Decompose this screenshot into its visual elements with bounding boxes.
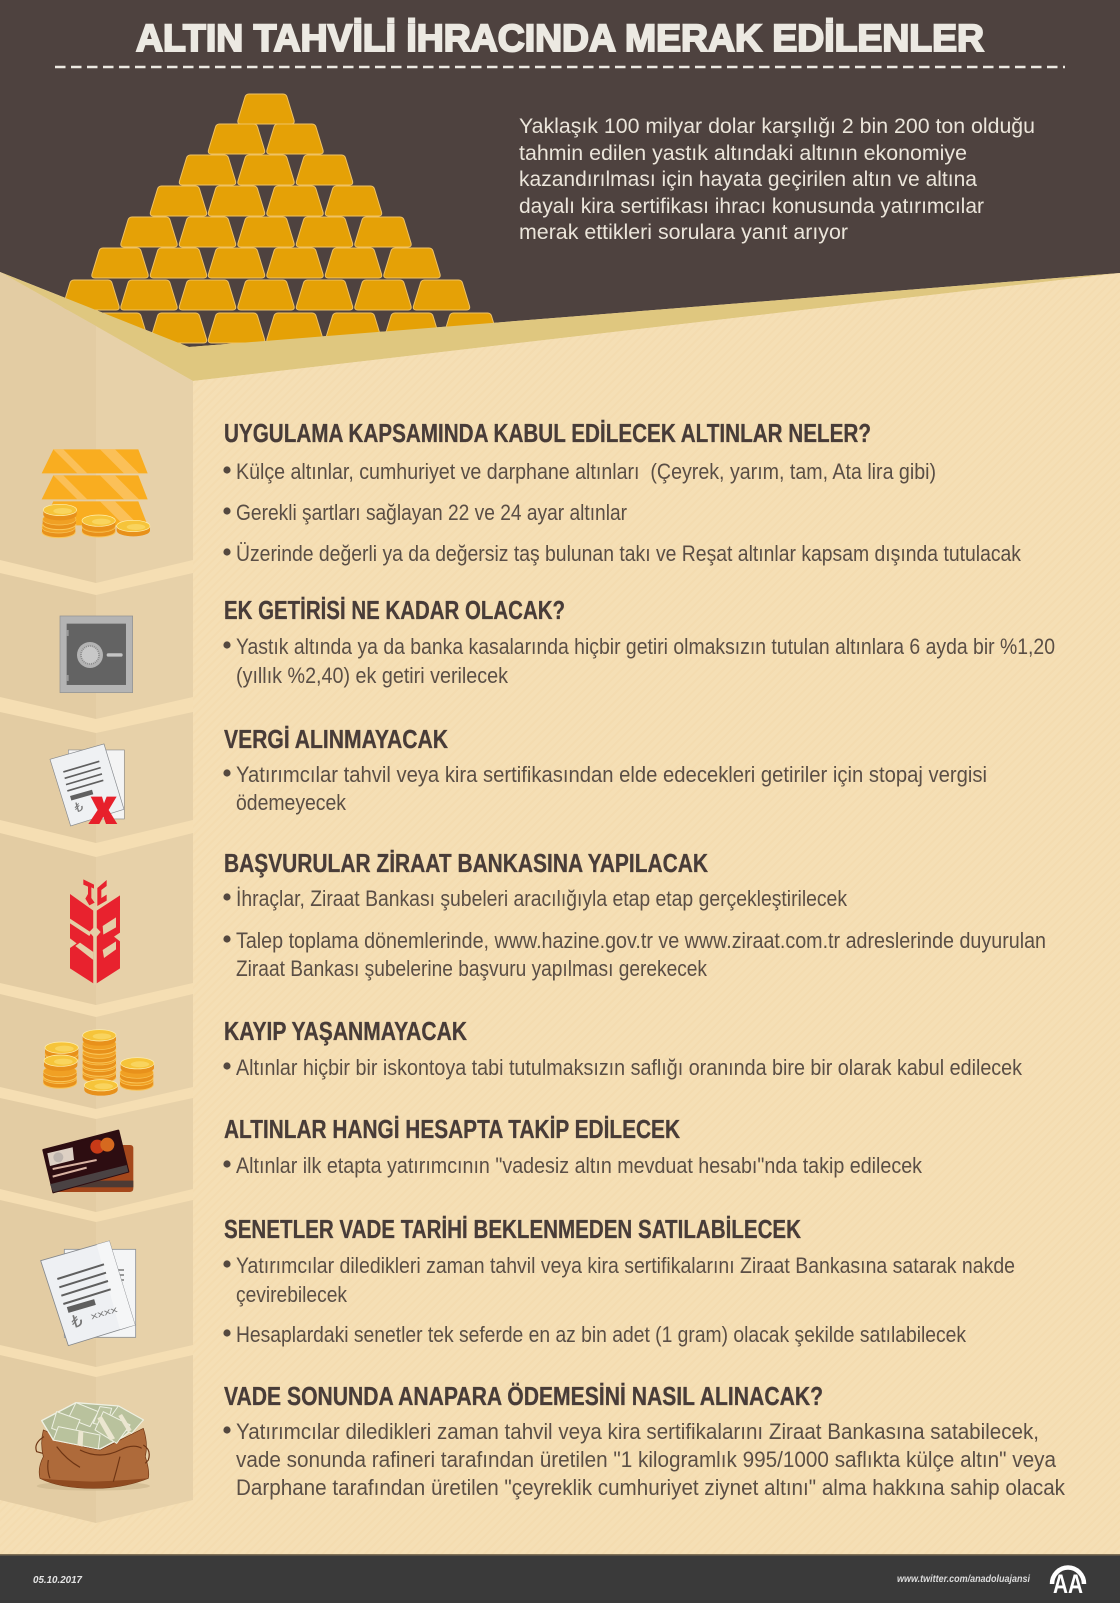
title: ALTIN TAHVİLİ İHRACINDA MERAK EDİLENLER — [136, 18, 984, 60]
section 1: accepted gold — [223, 418, 1022, 566]
section 8: principal payment: Darphane tarafından üretilen "çeyreklik cumhuriyet ziynet altını" alma hakkına sahip olacak — [236, 1475, 1066, 1500]
section 6: account — [223, 1114, 923, 1178]
section 4: applications: Ziraat Bankası şubelerine başvuru yapılması gerekecek — [236, 956, 708, 981]
social link: www.twitter.com/anadoluajansi — [897, 1574, 1030, 1585]
icon: money bag — [36, 1403, 150, 1491]
icon: bond documents: ₺ — [69, 1311, 85, 1333]
section 6: account: Altınlar ilk etapta yatırımcının "vadesiz altın mevduat hesabı"nda takip edilecek — [236, 1153, 923, 1178]
icon: tax document with red cross: ₺ — [73, 800, 86, 816]
footer bar — [0, 1554, 1120, 1603]
section 6: account: ALTINLAR HANGİ HESAPTA TAKİP EDİLECEK — [224, 1114, 680, 1144]
logo: Anadolu Agency: AA — [1053, 1569, 1083, 1599]
pyramid of gold bars — [63, 94, 499, 343]
icon: gold bars and coins — [42, 449, 150, 538]
section 1: accepted gold: Külçe altınlar, cumhuriyet ve darphane altınları (Çeyrek, yarım, tam, Ata lira gibi) — [236, 459, 936, 484]
section 5: no loss — [223, 1016, 1023, 1080]
intro text — [519, 114, 1035, 244]
intro text: tahmin edilen yastık altındaki altının ekonomiye — [519, 141, 967, 165]
section 1: accepted gold: Gerekli şartları sağlayan 22 ve 24 ayar altınlar — [236, 500, 627, 525]
date: 05.10.2017 — [33, 1575, 82, 1586]
section 8: principal payment: VADE SONUNDA ANAPARA ÖDEMESİNİ NASIL ALINACAK? — [224, 1381, 823, 1411]
section 5: no loss: Altınlar hiçbir bir iskontoya tabi tutulmaksızın saflığı oranında bire bir olarak kabul edilecek — [236, 1055, 1023, 1080]
intro text: dayalı kira sertifikası ihracı konusunda yatırımcılar — [519, 194, 984, 218]
icon: safe — [60, 616, 133, 693]
icon: bank cards — [43, 1131, 133, 1192]
section 7: sale before maturity: SENETLER VADE TARİHİ BEKLENMEDEN SATILABİLECEK — [224, 1214, 801, 1244]
section 3: no tax: VERGİ ALINMAYACAK — [224, 724, 448, 754]
section 2: extra return: (yıllık %2,40) ek getiri verilecek — [236, 663, 509, 688]
section 4: applications: İhraçlar, Ziraat Bankası şubeleri aracılığıyla etap etap gerçekleştirilecek — [236, 886, 848, 911]
section 7: sale before maturity: Hesaplardaki senetler tek seferde en az bin adet (1 gram) olacak şekilde satılabilecek — [236, 1322, 967, 1347]
icon: Ziraat Bankası logo — [70, 879, 120, 985]
intro text: kazandırılması için hayata geçirilen altın ve altına — [519, 167, 977, 191]
section 2: extra return — [223, 595, 1055, 688]
section 1: accepted gold: UYGULAMA KAPSAMINDA KABUL EDİLECEK ALTINLAR NELER? — [224, 418, 871, 448]
section 1: accepted gold: Üzerinde değerli ya da değersiz taş bulunan takı ve Reşat altınlar kapsam dışında tutulacak — [236, 541, 1022, 566]
icon: coin stacks — [43, 1030, 154, 1096]
left icon column — [0, 272, 193, 1523]
section 4: applications — [223, 848, 1046, 981]
section 3: no tax: ödemeyecek — [236, 790, 347, 815]
intro text: merak ettikleri sorulara yanıt arıyor — [519, 220, 848, 244]
section 2: extra return: EK GETİRİSİ NE KADAR OLACAK? — [224, 595, 565, 625]
icon: tax document with red cross — [50, 744, 124, 826]
header: dark panel — [0, 0, 1120, 347]
section 8: principal payment: vade sonunda rafineri tarafından üretilen "1 kilogramlık 995/1000 saflıkta külçe altın" veya — [236, 1447, 1057, 1472]
icon: bond documents — [41, 1241, 136, 1346]
section 8: principal payment: Yatırımcılar diledikleri zaman tahvil veya kira sertifikalarını Ziraat Bankasına satabilecek, — [236, 1419, 1039, 1444]
section 8: principal payment — [223, 1381, 1066, 1500]
icon: bond documents: xxxx — [89, 1304, 120, 1321]
section 7: sale before maturity — [223, 1214, 1015, 1347]
section 4: applications: BAŞVURULAR ZİRAAT BANKASINA YAPILACAK — [224, 848, 708, 878]
section 3: no tax: Yatırımcılar tahvil veya kira sertifikasından elde edecekleri getiriler için stopaj vergisi — [236, 762, 987, 787]
section 7: sale before maturity: çevirebilecek — [236, 1282, 348, 1307]
section 5: no loss: KAYIP YAŞANMAYACAK — [224, 1016, 467, 1046]
intro text: Yaklaşık 100 milyar dolar karşılığı 2 bin 200 ton olduğu — [519, 114, 1035, 138]
section 4: applications: Talep toplama dönemlerinde, www.hazine.gov.tr ve www.ziraat.com.tr adreslerinde duyurulan — [236, 928, 1046, 953]
section 3: no tax — [223, 724, 987, 815]
section 7: sale before maturity: Yatırımcılar diledikleri zaman tahvil veya kira sertifikalarını Ziraat Bankasına satarak nakde — [236, 1253, 1015, 1278]
